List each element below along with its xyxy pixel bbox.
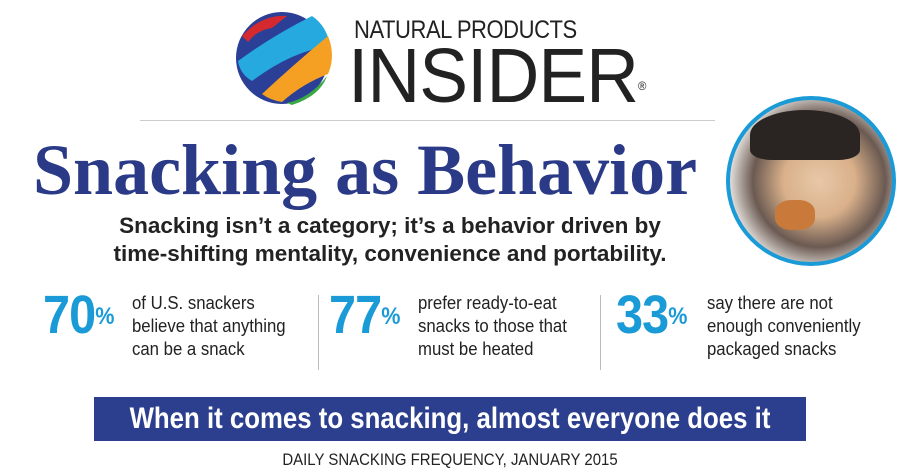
stat 2: snacks to those that	[418, 316, 567, 336]
subtitle: Snacking isn’t a category; it’s a behavior driven by	[119, 213, 661, 238]
stat 3	[616, 285, 861, 359]
subtitle: time-shifting mentality, convenience and portability.	[114, 241, 666, 266]
icon: globe	[236, 12, 332, 105]
stat 1: of U.S. snackers	[132, 293, 255, 313]
chart caption: DAILY SNACKING FREQUENCY, JANUARY 2015	[282, 450, 618, 469]
logo: INSIDER®	[348, 33, 646, 119]
stat 1: believe that anything	[132, 316, 286, 336]
photo	[726, 96, 896, 266]
logo text: NATURAL PRODUCTS	[354, 16, 577, 44]
title: Snacking as Behavior	[33, 130, 697, 210]
stat 2	[329, 285, 567, 359]
subtitle	[114, 213, 666, 266]
stat 1: 70%	[43, 285, 114, 345]
stat 2: must be heated	[418, 339, 533, 359]
banner	[94, 397, 806, 441]
stat 3: enough conveniently	[707, 316, 861, 336]
stat 2: prefer ready-to-eat	[418, 293, 557, 313]
logo	[236, 12, 646, 119]
stat 3: 33%	[616, 285, 687, 345]
stat 1: can be a snack	[132, 339, 245, 359]
stat 2: 77%	[329, 285, 400, 345]
stat 1	[43, 285, 286, 359]
banner: When it comes to snacking, almost everyone does it	[130, 402, 770, 435]
stat 3: packaged snacks	[707, 339, 836, 359]
stat 3: say there are not	[707, 293, 833, 313]
